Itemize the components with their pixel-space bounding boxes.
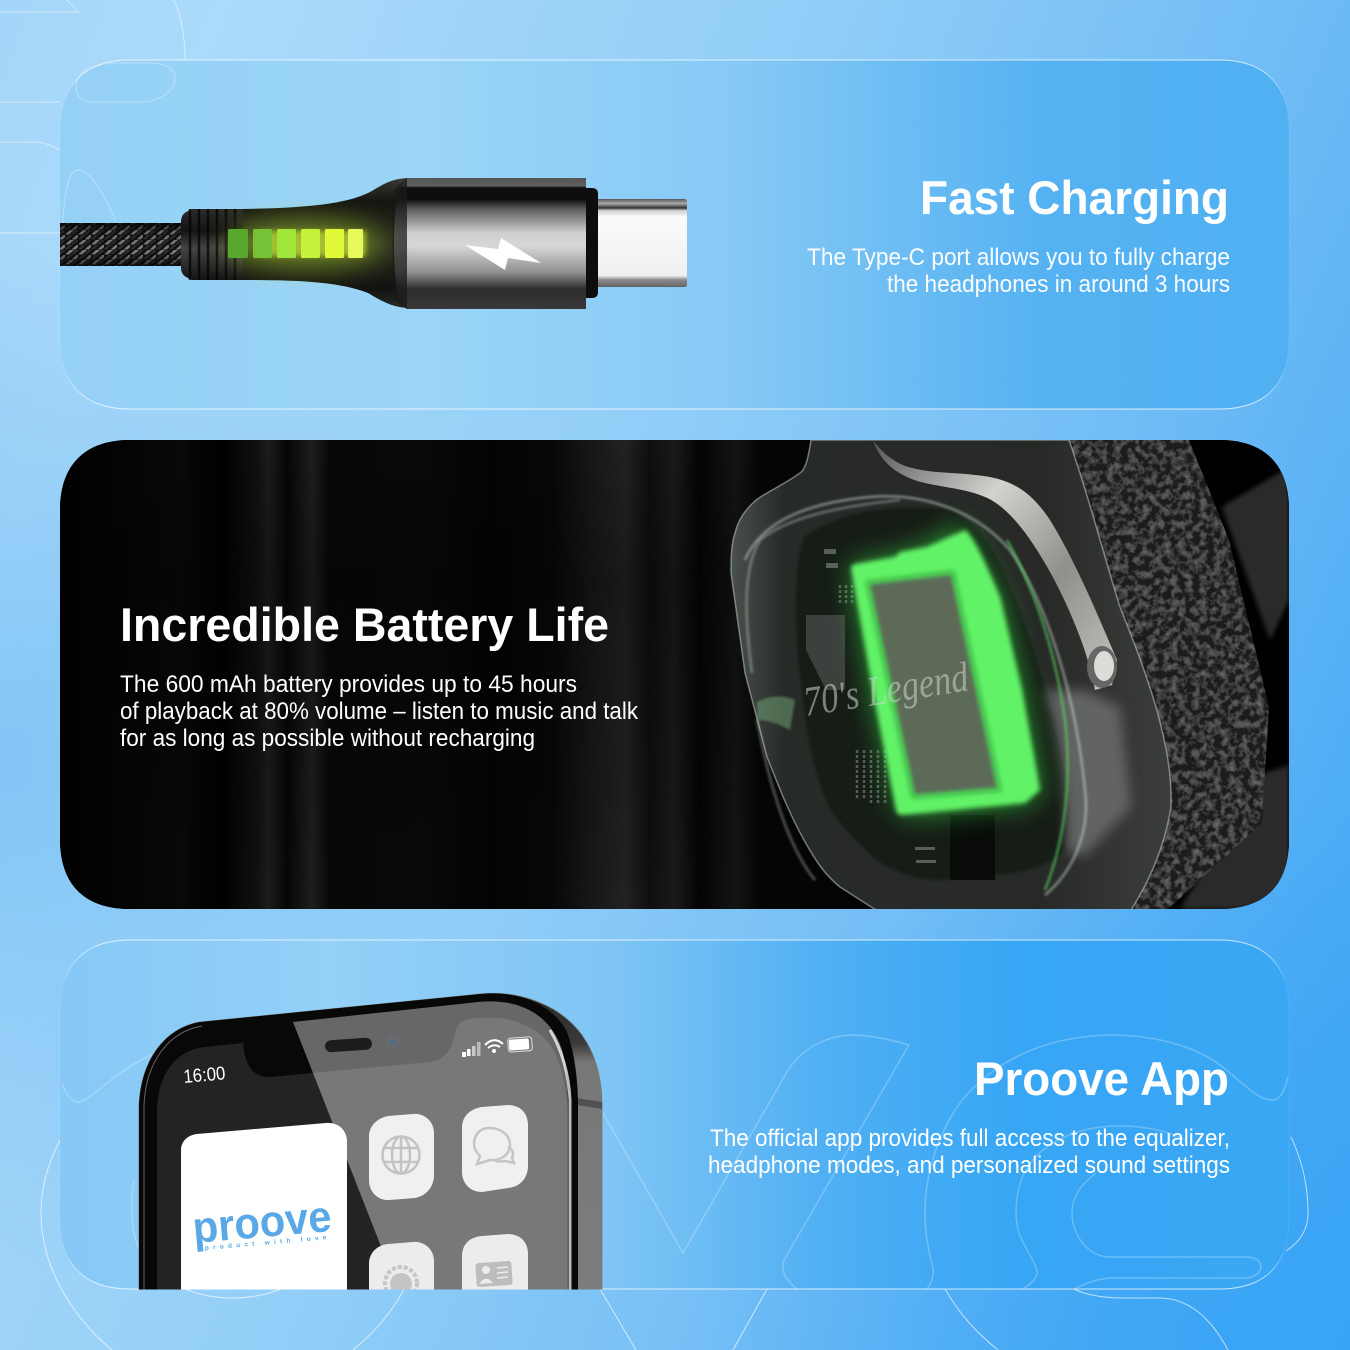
panel: proove app — [60, 940, 1289, 1300]
clear shell — [731, 440, 1171, 910]
heading: proove app: Proove App — [974, 1052, 1229, 1105]
silver headband arm — [873, 440, 1117, 690]
text: fast charging description: the headphones in around 3 hours — [887, 271, 1230, 298]
icon: smartphone with app screen — [139, 993, 602, 1300]
speaker and camera — [325, 1038, 395, 1052]
app icon: globe — [369, 1114, 434, 1200]
shell highlights — [745, 496, 1086, 895]
text: battery description: of playback at 80% volume – listen to music and talk — [120, 698, 639, 725]
heading: fast charging: Fast Charging — [920, 171, 1229, 224]
panel: fast charging — [60, 60, 1289, 409]
text: battery description: for as long as possible without recharging — [120, 725, 535, 752]
app icon: brightness — [369, 1242, 434, 1290]
status time: 16:00 — [183, 1063, 226, 1088]
app card: proove logo: product with love — [205, 1234, 327, 1252]
panel: battery life — [60, 440, 1289, 910]
glare overlay — [293, 1001, 568, 1300]
phone metal frame — [139, 993, 602, 1300]
pin — [1087, 646, 1117, 688]
green battery glow — [851, 525, 1040, 815]
text: fast charging description: The Type-C port allows you to fully charge — [807, 244, 1230, 271]
leather headband — [1069, 440, 1269, 910]
cushion — [1180, 467, 1289, 909]
icon: transparent headphone ear cup with glowing battery — [731, 440, 1289, 910]
icon: usb-c cable with led indicator — [60, 178, 687, 309]
app card: proove logo: proove — [191, 1192, 333, 1253]
app icon: profile — [462, 1234, 528, 1290]
circuit board — [796, 508, 1067, 880]
app icon: chat — [462, 1105, 528, 1192]
text: battery description — [120, 671, 639, 752]
status icons — [462, 1037, 532, 1057]
text: app description — [708, 1125, 1230, 1179]
grey inner area — [1045, 690, 1131, 857]
text: app description: The official app provides full access to the equalizer, — [710, 1125, 1230, 1152]
text: battery description: The 600 mAh battery provides up to 45 hours — [120, 671, 577, 698]
engraved signature: 70's Legend — [800, 654, 972, 726]
heading: battery life: Incredible Battery Life — [120, 598, 609, 651]
phone black bezel — [139, 993, 578, 1300]
text: fast charging description — [807, 244, 1230, 298]
panel outline lettering — [62, 1035, 1288, 1289]
led segments — [228, 229, 363, 258]
app card: proove logo — [181, 1123, 347, 1300]
text: app description: headphone modes, and personalized sound settings — [708, 1152, 1230, 1179]
screen — [157, 1018, 567, 1300]
